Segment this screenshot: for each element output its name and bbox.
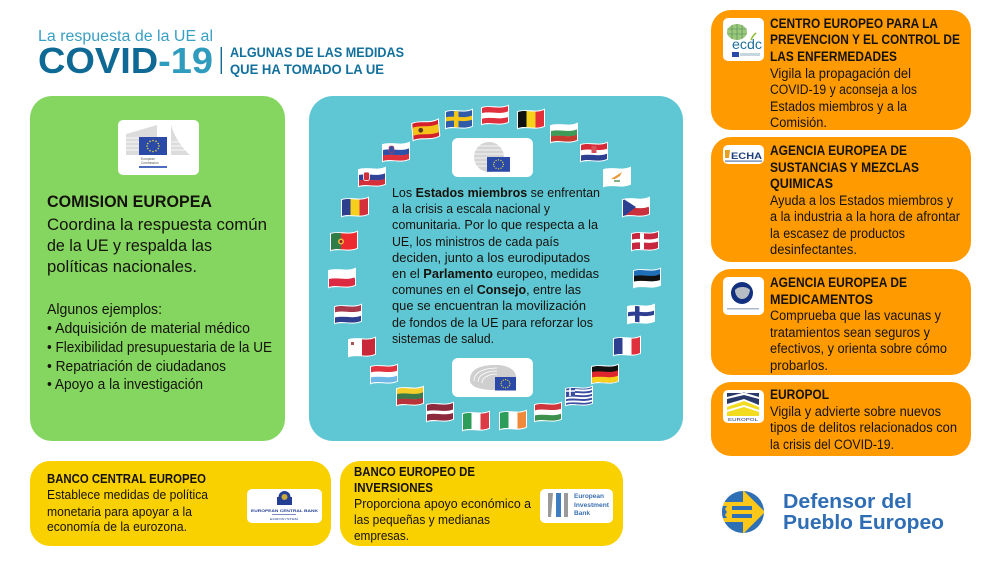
text block: Estados miembros: que se encuentran la movilización <box>392 298 586 313</box>
flag: Portugal <box>330 230 358 252</box>
flag: Romania <box>341 196 369 218</box>
title: QUE HA TOMADO LA UE <box>230 61 384 77</box>
text block: ECHA <box>770 143 961 257</box>
flag: Estonia <box>633 268 661 288</box>
flag: Greece <box>565 386 593 406</box>
text block: ECHA: AGENCIA EUROPEA DE <box>770 143 907 158</box>
title <box>38 28 404 81</box>
panel: Estados miembros <box>309 96 683 441</box>
text block: ECHA: QUIMICAS <box>770 176 833 191</box>
text block: ECDC: Estados miembros y a la <box>770 99 908 114</box>
logo: Defensor del Pueblo Europeo: Pueblo Europeo <box>783 512 944 534</box>
icon: ECB logo: EUROPEAN CENTRAL BANK <box>251 509 319 513</box>
text block: BEI: INVERSIONES <box>354 480 433 495</box>
text block: BEI: Proporciona apoyo económico a <box>354 496 532 511</box>
title: ALGUNAS DE LAS MEDIDAS <box>230 44 404 60</box>
flag: Finland <box>627 304 655 324</box>
icon: Parliament logo <box>452 358 533 397</box>
text block: Estados miembros <box>392 185 600 346</box>
logo: Defensor del Pueblo Europeo <box>720 490 944 534</box>
panel: Europol <box>711 382 971 456</box>
text block: BEI <box>354 464 532 543</box>
flag: Germany <box>591 364 619 384</box>
text block: coordina: Coordina la respuesta común <box>47 216 267 234</box>
flag: Spain <box>411 118 440 142</box>
flag: Denmark <box>631 230 659 252</box>
text block: EMA <box>770 275 947 373</box>
text block: ejemplos: • Apoyo a la investigación <box>47 377 203 393</box>
text block: Estados miembros: Los Estados miembros se enfrentan <box>392 185 600 200</box>
icon: European Commission logo <box>118 120 199 175</box>
text block: BEI: las pequeñas y medianas <box>354 512 490 527</box>
text block: ECHA: Ayuda a los Estados miembros y <box>770 193 953 208</box>
text block: Estados miembros: en el Parlamento europeo, medidas <box>392 266 599 281</box>
flag: Hungary <box>534 402 562 422</box>
icon: EIB logo: Bank <box>574 510 591 517</box>
text block: coordina: políticas nacionales. <box>47 258 197 276</box>
text block: EMA: MEDICAMENTOS <box>770 292 873 307</box>
icon: EIB logo: European <box>574 493 604 500</box>
text block: ECDC: COVID-19 y aconseja a los <box>770 82 917 97</box>
text block: Europol: Vigila y advierte sobre nuevos <box>770 404 941 419</box>
flag: Bulgaria <box>550 122 578 144</box>
text block: Europol: la crisis del COVID-19. <box>770 437 894 452</box>
text block: ECHA: a la industria a la hora de afrontar <box>770 209 961 224</box>
flag: Belgium <box>517 108 545 130</box>
icon: Council logo <box>452 138 533 177</box>
icon: ECDC logo <box>723 18 764 61</box>
text block: coordina: de la UE y respalda las <box>47 237 212 255</box>
icon: Europol logo: EUROPOL <box>728 417 759 422</box>
text block: BCE: Establece medidas de política <box>47 487 209 502</box>
text block: ECDC: Comisión. <box>770 115 827 130</box>
flag: Ireland <box>499 410 527 430</box>
icon: EMA logo <box>723 277 764 315</box>
icon: EIB logo <box>540 489 613 523</box>
text block: ECDC: LAS ENFERMEDADES <box>770 49 897 64</box>
title: La respuesta de la UE al <box>38 28 213 45</box>
icon: ECB logo: EUROSYSTEM <box>270 517 299 521</box>
heading: Comisión Europea: COMISION EUROPEA <box>47 192 212 211</box>
text block: Estados miembros: de fondos de la UE para reforzar los <box>392 315 593 330</box>
text block: Europol <box>770 387 957 452</box>
text block: ECHA: la escasez de productos <box>770 226 905 241</box>
flag: Czech Republic <box>622 196 650 218</box>
text block: Estados miembros: UE, los ministros de cada país <box>392 234 559 249</box>
flag: Poland <box>328 268 356 288</box>
flag: Malta <box>348 336 376 358</box>
icon: ECDC logo: ecdc <box>732 36 762 52</box>
text block: ECDC <box>770 16 960 130</box>
text block: ejemplos: • Repatriación de ciudadanos <box>47 359 226 375</box>
icon: European Commission logo: Commission <box>141 161 159 165</box>
text block: ECHA: SUSTANCIAS Y MEZCLAS <box>770 160 919 175</box>
icon: ECB logo <box>247 489 322 523</box>
text block: BCE: BANCO CENTRAL EUROPEO <box>47 471 206 486</box>
logo: Defensor del Pueblo Europeo: Defensor del <box>783 491 912 513</box>
flag: France <box>613 336 641 356</box>
text block: EMA: AGENCIA EUROPEA DE <box>770 275 907 290</box>
text block: BEI: BANCO EUROPEO DE <box>354 464 475 479</box>
text block: ECHA: desinfectantes. <box>770 242 857 257</box>
flag: Luxembourg <box>370 364 398 384</box>
text block: Estados miembros: a la crisis a escala nacional y <box>392 201 550 216</box>
text block: EMA: Comprueba que las vacunas y <box>770 308 941 323</box>
flag: Croatia <box>580 142 608 162</box>
icon: ECHA logo <box>723 145 764 164</box>
text block: Estados miembros: comunes en el Consejo, entre las <box>392 282 581 297</box>
text block: Estados miembros: comunitaria. Por lo que respecta a la <box>392 217 599 232</box>
text block: BEI: empresas. <box>354 528 409 543</box>
text block: Estados miembros: deciden, junto a los eurodiputados <box>392 250 590 265</box>
flag: Netherlands <box>334 304 362 324</box>
panel: Banco Central Europeo <box>30 461 331 546</box>
text block: ejemplos: Algunos ejemplos: <box>47 302 162 318</box>
panel: Comisión Europea <box>30 96 285 441</box>
text block: ejemplos: • Adquisición de material médico <box>47 321 250 337</box>
text block: ejemplos: • Flexibilidad presupuestaria de la UE <box>47 340 272 356</box>
flag: Slovenia <box>382 142 410 162</box>
text block: coordina <box>47 216 267 276</box>
title: COVID-19 <box>38 40 213 81</box>
panel: ECHA <box>711 137 971 262</box>
icon: Ombudsman emblem <box>722 491 764 533</box>
text block: ejemplos <box>47 302 272 393</box>
panel: EMA <box>711 269 971 375</box>
text block: EMA: efectivos, y orienta sobre cómo <box>770 341 947 356</box>
text block: Estados miembros: sistemas de salud. <box>392 331 494 346</box>
text block: ECDC: PREVENCION Y EL CONTROL DE <box>770 32 960 47</box>
text block: BCE: monetaria para apoyar a la <box>47 504 193 519</box>
text block: ECDC: CENTRO EUROPEO PARA LA <box>770 16 938 31</box>
flag: Sweden <box>445 108 473 130</box>
icon: Europol logo <box>723 390 764 423</box>
text block: ECDC: Vigila la propagación del <box>770 66 911 81</box>
flag: Austria <box>481 104 509 126</box>
icon: EIB logo: Investment <box>574 502 609 509</box>
panel: ECDC <box>711 10 971 130</box>
text block: Europol: tipos de delitos relacionados con <box>770 420 957 435</box>
text block: Europol: EUROPOL <box>770 387 829 402</box>
flag: Slovakia <box>358 166 386 188</box>
text block: EMA: tratamientos sean seguros y <box>770 325 930 340</box>
text block: BCE: economía de la eurozona. <box>47 519 187 534</box>
flag: Lithuania <box>396 386 424 406</box>
flag: Cyprus <box>603 166 631 188</box>
text block: BCE <box>47 471 209 534</box>
flag: Italy <box>462 410 490 432</box>
text block: EMA: probarlos. <box>770 358 828 373</box>
flag: Latvia <box>426 402 454 422</box>
panel: Banco Europeo de Inversiones <box>340 461 623 546</box>
icon: ECHA logo: ECHA <box>731 151 762 162</box>
icon: European Commission logo: European <box>141 157 155 161</box>
